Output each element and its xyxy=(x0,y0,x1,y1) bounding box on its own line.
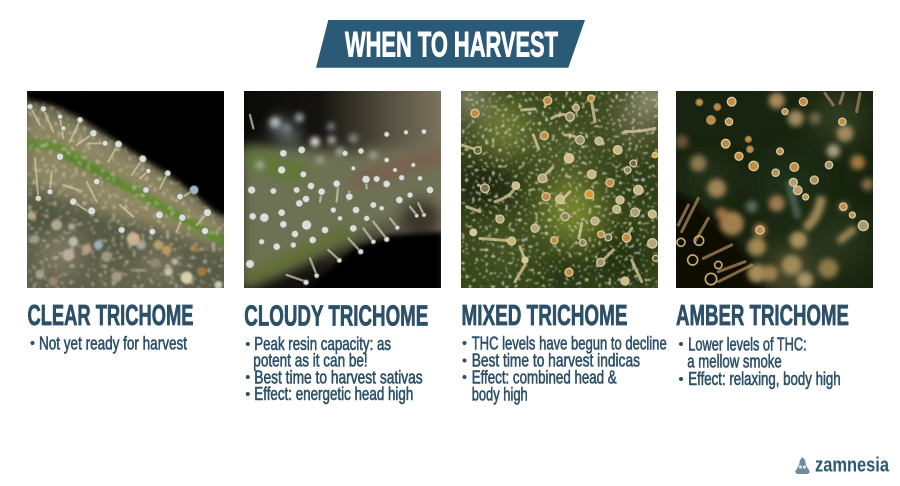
bullet list: mixed trichome: Effect: combined head & xyxy=(472,367,617,387)
bullet list: mixed trichome: THC levels have begun to decline xyxy=(472,333,667,353)
title banner xyxy=(316,20,585,68)
panel: amber trichome xyxy=(672,91,874,389)
bullet list: amber trichome: Effect: relaxing, body high xyxy=(688,369,841,389)
logo: zamnesia xyxy=(795,455,890,477)
bullet list: mixed trichome xyxy=(462,333,667,405)
heading: cloudy trichome: CLOUDY TRICHOME xyxy=(244,300,428,332)
heading: mixed trichome: MIXED TRICHOME xyxy=(462,300,628,332)
icon: zamnesia mascot xyxy=(795,457,810,474)
bullet list: cloudy trichome xyxy=(246,334,423,404)
bullet list: cloudy trichome: potent as it can be! xyxy=(253,351,368,371)
heading: clear trichome: CLEAR TRICHOME xyxy=(28,300,194,332)
bullet list: mixed trichome: body high xyxy=(472,385,528,405)
photo: clear trichomes xyxy=(27,91,224,288)
title banner: WHEN TO HARVEST xyxy=(345,26,558,65)
bullet list: mixed trichome: Best time to harvest indicas xyxy=(472,351,640,371)
bullet list: amber trichome: a mellow smoke xyxy=(687,351,782,371)
bullet list: amber trichome: Lower levels of THC: xyxy=(688,335,807,355)
bullet list: clear trichome: Not yet ready for harvest xyxy=(39,333,187,353)
panel: clear trichome xyxy=(20,88,233,353)
panel: cloudy trichome xyxy=(240,91,443,404)
bullet list: cloudy trichome: Peak resin capacity: as xyxy=(254,334,391,354)
bullet list: amber trichome xyxy=(679,335,841,389)
photo: mixed trichomes xyxy=(461,91,658,288)
bullet list: cloudy trichome: Best time to harvest sativas xyxy=(254,367,423,387)
photo: cloudy trichomes xyxy=(240,91,443,298)
photo: amber trichomes xyxy=(672,91,874,298)
panel: mixed trichome xyxy=(452,82,668,405)
bullet list: cloudy trichome: Effect: energetic head high xyxy=(254,384,413,404)
